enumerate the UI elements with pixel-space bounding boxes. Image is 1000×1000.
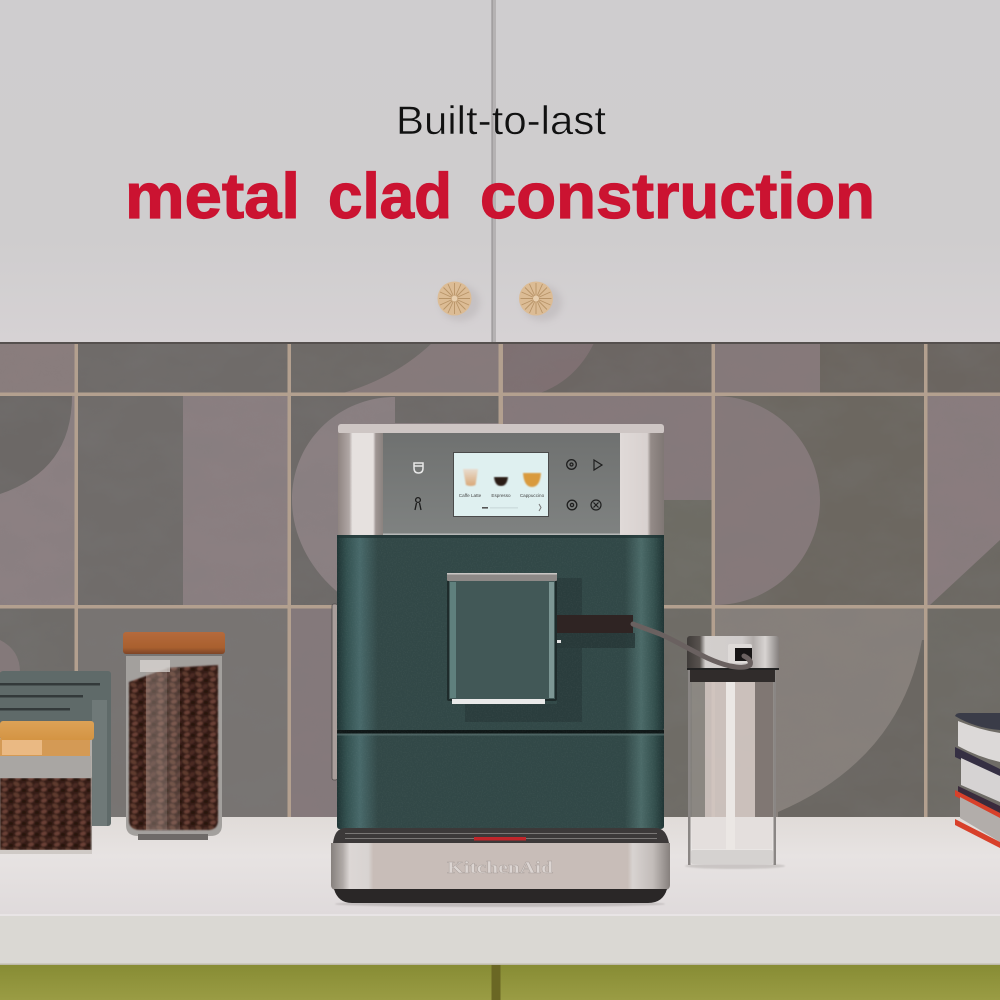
milk spout arm <box>557 615 633 633</box>
tile row 1 <box>0 343 1000 393</box>
right steel column <box>620 433 664 535</box>
icon: bean cup <box>414 463 423 473</box>
icon: cancel <box>591 500 601 510</box>
coffee spout <box>447 573 561 704</box>
stone tray behind jars <box>0 671 111 826</box>
steel base <box>331 843 670 890</box>
countertop <box>0 817 1000 966</box>
lower cabinets <box>0 965 1000 1000</box>
drink: caffe latte: Caffe Latte <box>459 493 482 498</box>
icon: cabinet knob right <box>519 282 562 321</box>
books stack <box>955 713 1000 848</box>
tall coffee jar <box>123 632 225 840</box>
left steel column <box>338 433 383 535</box>
upper green body <box>337 535 664 731</box>
drip tray grille <box>333 828 669 843</box>
title line 2: metal <box>125 160 300 232</box>
water tank left handle <box>332 604 338 780</box>
wall cabinets <box>0 0 1000 344</box>
wooden lid <box>123 632 225 654</box>
base foot <box>334 889 667 903</box>
title <box>125 99 875 232</box>
title line 1: Built-to-last <box>396 99 606 143</box>
control panel <box>383 433 620 535</box>
milk container <box>685 636 785 869</box>
container body <box>685 863 785 869</box>
background: tiled backsplash <box>0 343 1000 823</box>
icon: play <box>594 460 602 470</box>
icon: clean <box>567 460 576 469</box>
spout shadow <box>465 578 635 722</box>
container lid <box>687 636 779 670</box>
grout lines <box>0 343 1000 819</box>
tile mottling <box>0 343 1000 819</box>
counter shadow under machine <box>335 901 665 907</box>
title line 2 <box>125 160 875 232</box>
red indicator <box>474 837 526 840</box>
lower green drawer <box>337 734 664 829</box>
short coffee jar <box>0 721 94 854</box>
orange lid <box>0 721 94 740</box>
tile row 3 <box>0 608 1000 818</box>
coffee machine <box>331 424 750 907</box>
drink: cappuccino: Cappuccino <box>520 493 545 498</box>
divider <box>337 730 664 734</box>
icon: person <box>415 498 421 510</box>
brand logo: KitchenAid <box>447 858 554 877</box>
icon: settings <box>567 500 577 510</box>
drink: espresso: Espresso <box>491 493 511 498</box>
body speckle <box>337 538 664 829</box>
milk tube <box>633 624 750 667</box>
tile row 2 <box>0 396 1000 605</box>
machine top cap <box>338 424 664 434</box>
touchscreen <box>453 452 549 517</box>
title line 2: construction <box>480 160 875 232</box>
title line 2: clad <box>328 160 452 232</box>
icon: cabinet knob left <box>438 282 480 321</box>
